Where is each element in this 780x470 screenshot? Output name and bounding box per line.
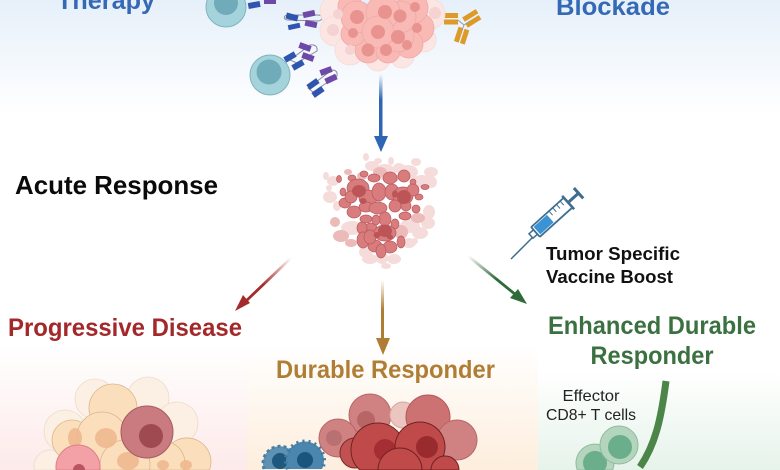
icon: bispecific antibody 1 — [284, 10, 322, 30]
heading: Enhanced Durable Responder: Enhanced Durable — [548, 312, 756, 340]
heading: Acute Response: Acute Response — [15, 170, 218, 200]
illustration: acute response tumor fragments — [323, 153, 438, 269]
label: Effector CD8+ T cells: Effector — [562, 388, 620, 405]
panel: enhanced durable responder background — [538, 372, 780, 470]
label: Tumor Specific Vaccine Boost — [546, 243, 680, 287]
icon: bispecific antibody 2 — [283, 42, 317, 71]
arrow: to progressive disease — [235, 258, 291, 311]
panel: top treatment background — [0, 0, 780, 115]
illustration: progressive disease tumor — [34, 377, 211, 470]
heading: Enhanced Durable Responder — [548, 312, 756, 370]
icon: T cell upper — [206, 0, 246, 27]
chart curve: enhanced response — [640, 381, 666, 467]
label: Tumor Specific Vaccine Boost: Vaccine Boost — [546, 266, 673, 287]
arrow: blue down — [374, 74, 388, 152]
illustration: tumor mass top — [320, 0, 445, 71]
heading: Durable Responder: Durable Responder — [276, 356, 495, 384]
icon: bispecific antibody top — [248, 0, 276, 9]
panel: durable responder background — [247, 345, 538, 470]
illustration: durable responder tumor — [319, 394, 477, 470]
icon: dendritic immune cells — [263, 442, 324, 469]
arrow: to durable responder — [376, 280, 390, 355]
heading: Progressive Disease: Progressive Disease — [8, 314, 242, 342]
icon: vaccine syringe — [511, 186, 585, 259]
icon: checkpoint antibody — [444, 9, 481, 45]
heading: Enhanced Durable Responder: Responder — [590, 342, 714, 370]
icon: bispecific antibody 3 — [306, 66, 338, 98]
icon: T cell lower — [250, 55, 290, 95]
icon: effector T cells — [576, 426, 638, 470]
panel: progressive disease background — [0, 345, 247, 470]
label: Effector CD8+ T cells — [546, 388, 636, 424]
label: Effector CD8+ T cells: CD8+ T cells — [546, 407, 636, 424]
arrow: to enhanced durable responder — [468, 256, 527, 304]
label: Tumor Specific Vaccine Boost: Tumor Specific — [546, 243, 680, 264]
